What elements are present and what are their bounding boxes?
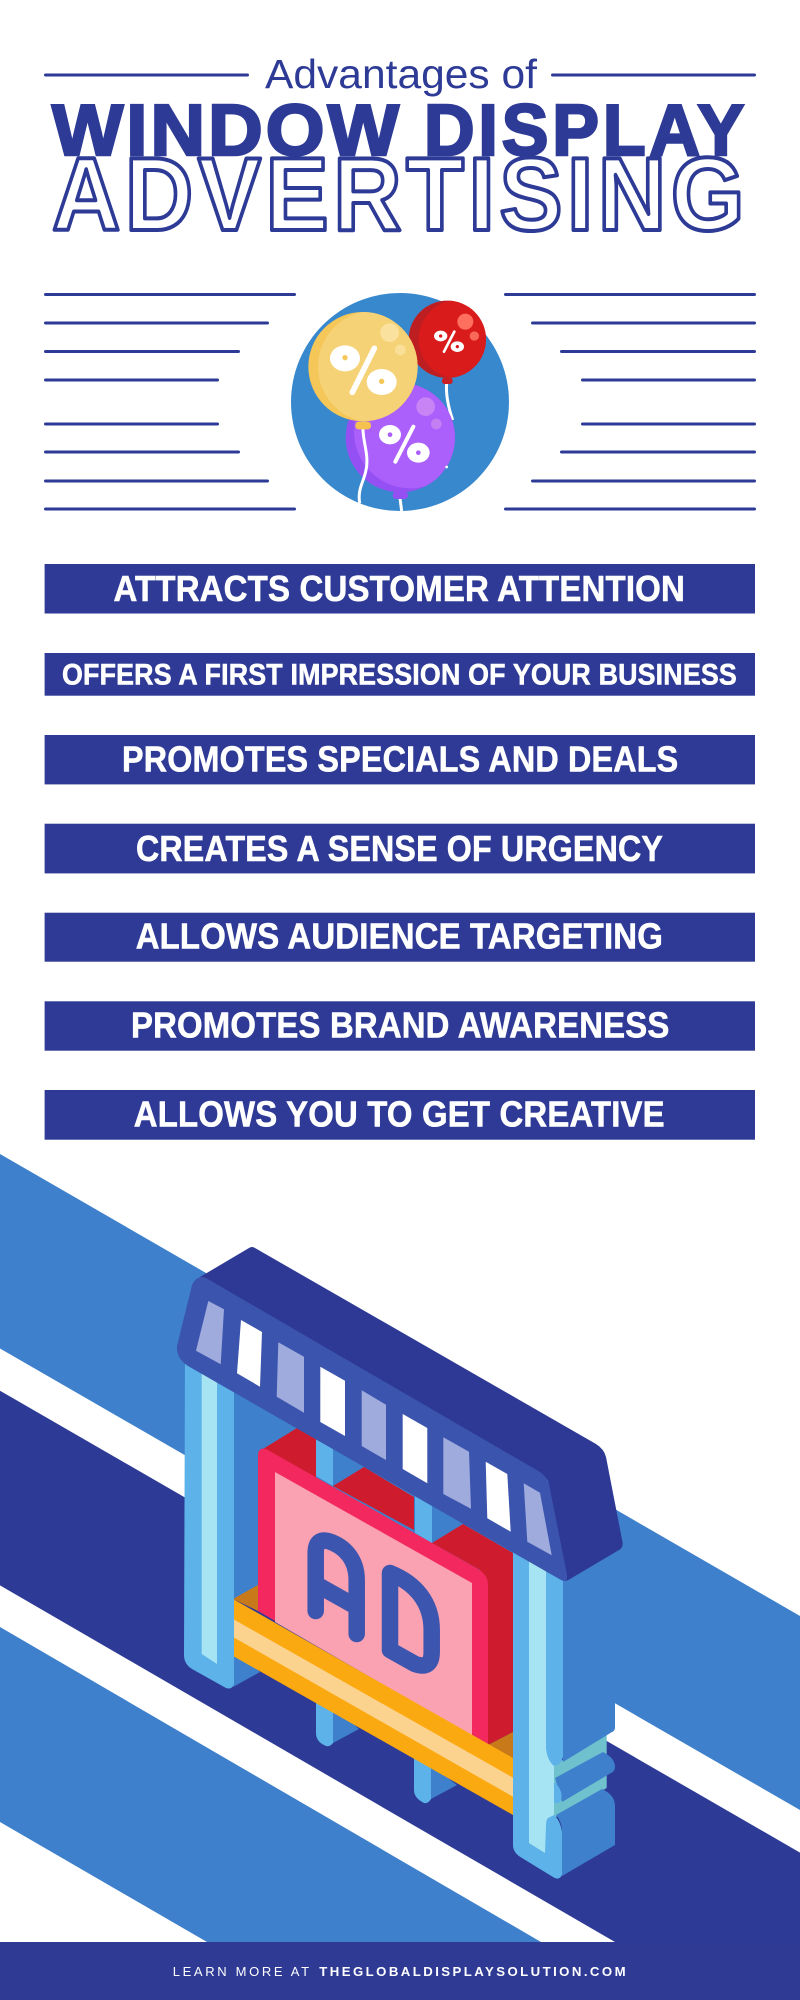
awning roof (200, 1247, 623, 1581)
orange bench (233, 1599, 513, 1815)
banner 4: CREATES A SENSE OF URGENCY (136, 828, 663, 869)
purple balloon (346, 384, 455, 499)
red balloon (408, 300, 486, 384)
icon: isometric ad billboard (177, 1247, 623, 1879)
purple balloon string (400, 498, 402, 511)
right pole (513, 1540, 563, 1879)
decorative lines right of balloons (504, 293, 756, 510)
title line: Display: DISPLAY (424, 91, 748, 171)
background diagonal stripes (0, 1154, 800, 1942)
sign panel (275, 1472, 472, 1736)
title line: Advantages of: Advantages of (265, 51, 538, 97)
banner 3: PROMOTES SPECIALS AND DEALS (122, 739, 678, 780)
footer text regular: LEARN MORE AT (173, 1964, 312, 1979)
brown bench shade (233, 1585, 513, 1760)
list of advantages (45, 564, 755, 1140)
banner 2: OFFERS A FIRST IMPRESSION OF YOUR BUSINESS (62, 659, 737, 692)
awning panels (196, 1301, 552, 1555)
red balloon string (446, 383, 453, 420)
footer (0, 1942, 800, 2000)
banner 1: ATTRACTS CUSTOMER ATTENTION (114, 568, 685, 609)
back poles and side shadows (233, 1372, 478, 1803)
banner 7: ALLOWS YOU TO GET CREATIVE (134, 1094, 665, 1135)
banner 7 (45, 1090, 755, 1140)
decorative lines left of balloons (44, 293, 296, 510)
banner 5: ALLOWS AUDIENCE TARGETING (136, 916, 663, 957)
letters AD (316, 1540, 432, 1666)
footer bar (0, 1942, 800, 2000)
yellow balloon string (359, 428, 367, 503)
left pole (184, 1360, 234, 1688)
title (44, 51, 756, 253)
banner 5 (45, 913, 755, 962)
title rule right (551, 74, 756, 76)
yellow balloon (308, 312, 418, 430)
title line: Advertising outline: ADVERTISING (52, 137, 749, 253)
awning front (177, 1277, 567, 1581)
banner 6: PROMOTES BRAND AWARENESS (131, 1005, 670, 1046)
icon: balloons in circle (291, 293, 509, 511)
title line: Window: WINDOW (52, 91, 402, 171)
title rule left (44, 74, 249, 76)
sign frame (258, 1449, 488, 1745)
right pole back block and teal gap (542, 1530, 615, 1876)
red sign back (258, 1428, 513, 1745)
banner 4 (45, 824, 755, 873)
banner 6 (45, 1001, 755, 1051)
footer text bold: THEGLOBALDISPLAYSOLUTION.COM (319, 1964, 628, 1979)
blue circle (291, 293, 509, 511)
